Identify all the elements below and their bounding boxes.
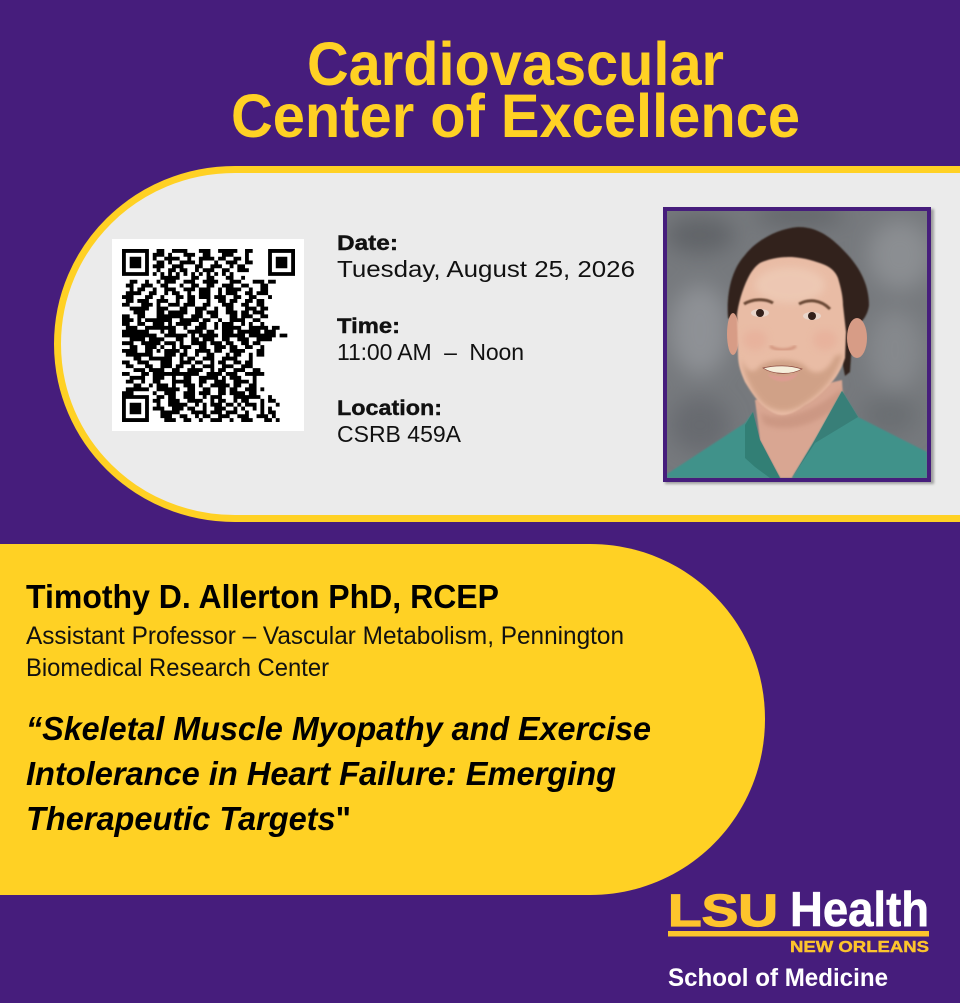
ears: [727, 313, 739, 355]
logo: LSU Health New Orleans School of Medicine: NEW ORLEANS: [790, 939, 929, 956]
hair back: [728, 227, 869, 376]
speaker photo: [663, 203, 934, 484]
logo: LSU Health New Orleans School of Medicine: LSU: [668, 885, 778, 936]
location: Location:: [337, 397, 442, 420]
neck: [755, 380, 843, 478]
talk title: [26, 710, 651, 837]
QR code: [112, 239, 304, 431]
logo: LSU Health New Orleans School of Medicine: [668, 883, 929, 992]
stubble: [741, 354, 843, 411]
speaker affiliation: Biomedical Research Center: [26, 654, 329, 682]
date: [337, 232, 635, 282]
time: Time:: [337, 315, 400, 338]
time: 11:00 AM – Noon: [337, 339, 524, 365]
talk title: Intolerance in Heart Failure: Emerging: [26, 755, 616, 792]
mouth: [770, 374, 796, 381]
time: [337, 315, 524, 365]
panel shape: [58, 170, 960, 518]
talk title: Therapeutic Targets": [26, 800, 351, 837]
speaker name: Timothy D. Allerton PhD, RCEP: [26, 578, 499, 615]
shirt: [667, 391, 927, 478]
speaker affiliation: [26, 622, 624, 682]
title: [231, 30, 800, 150]
speaker affiliation: Assistant Professor – Vascular Metabolism, Pennington: [26, 622, 624, 650]
title: Center of Excellence: [231, 82, 800, 150]
nose: [770, 346, 796, 350]
logo: LSU Health New Orleans School of Medicine: School of Medicine: [668, 964, 888, 992]
date: Tuesday, August 25, 2026: [337, 256, 635, 282]
panel: speaker: [0, 544, 765, 895]
face: [737, 257, 846, 415]
eyes and brows: [744, 300, 830, 309]
panel shape: [0, 544, 765, 895]
logo: LSU Health New Orleans School of Medicine: Health: [790, 883, 929, 937]
location: [337, 397, 462, 447]
panel: event details: [58, 170, 960, 518]
title: Cardiovascular: [307, 30, 724, 98]
location: CSRB 459A: [337, 421, 462, 447]
talk title: “Skeletal Muscle Myopathy and Exercise: [26, 710, 651, 747]
date: Date:: [337, 232, 398, 255]
